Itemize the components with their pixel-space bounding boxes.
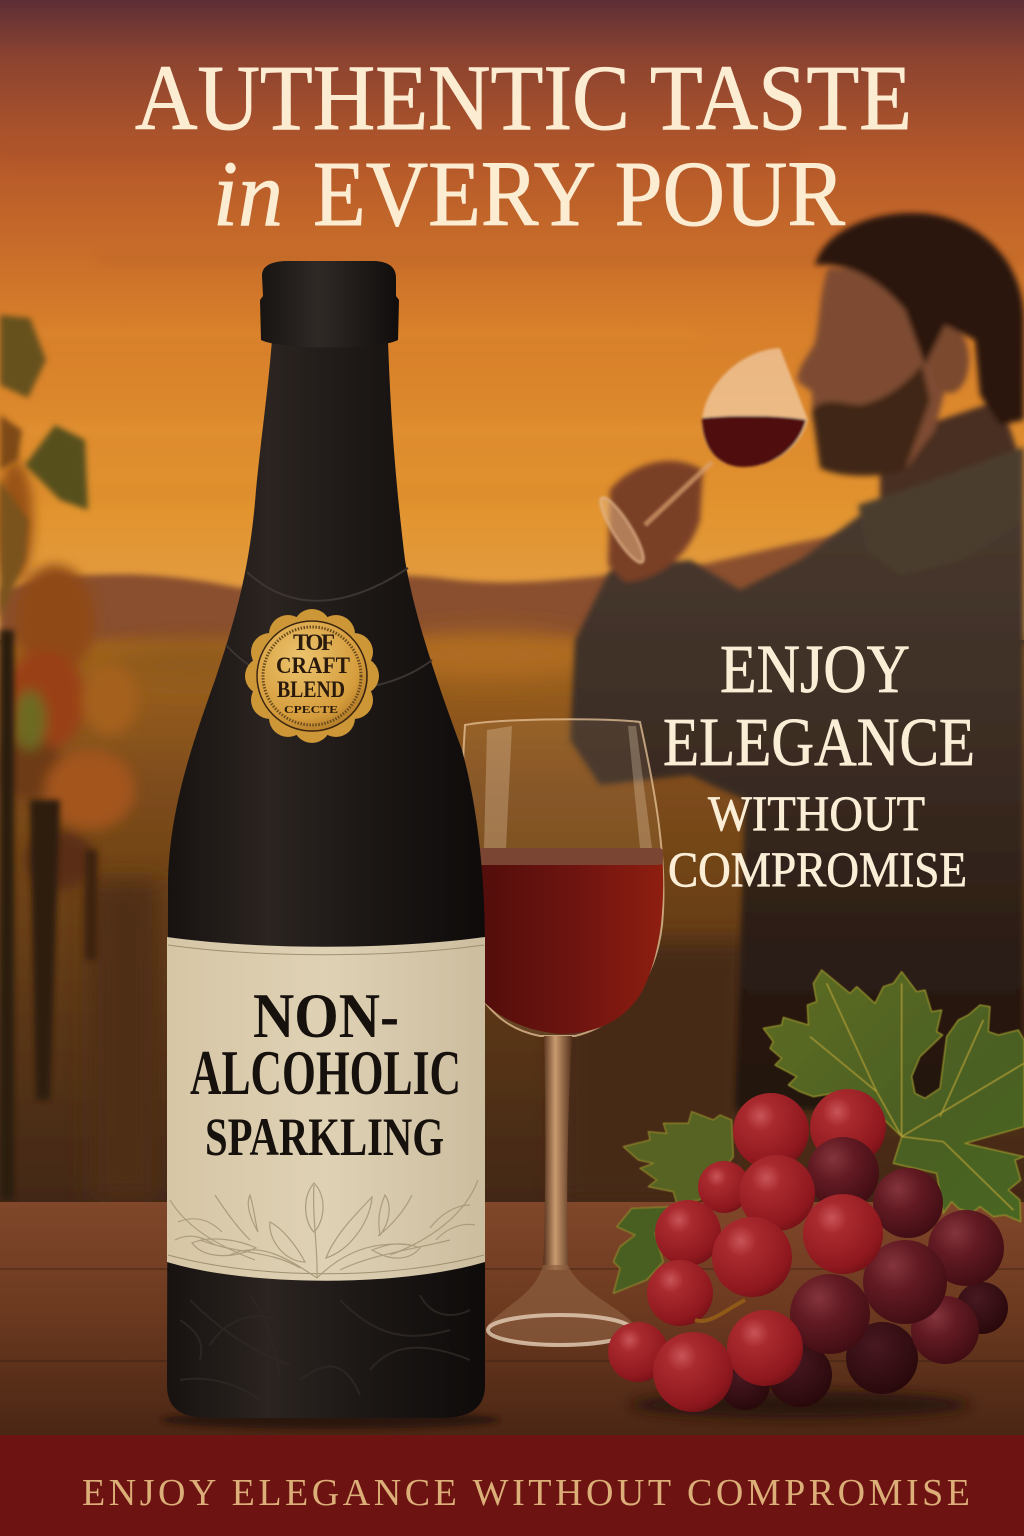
gold seal: CPECTE [284, 704, 338, 716]
label text: non-alcoholic sparkling [190, 980, 461, 1167]
bottle body [167, 340, 485, 1418]
hand holding glass [608, 461, 703, 582]
stem [543, 1036, 572, 1270]
turtleneck collar [858, 447, 1024, 575]
large grape leaf [763, 970, 1024, 1222]
banner text: ENJOY ELEGANCE WITHOUT COMPROMISE [82, 1472, 970, 1514]
glass bowl [462, 719, 663, 1036]
background: sunset sky [0, 0, 1024, 640]
bottle [160, 261, 500, 1429]
grape leaves [613, 970, 1024, 1293]
gold seal [245, 609, 379, 743]
front red grapes [608, 1089, 886, 1412]
side tagline [663, 631, 975, 897]
background: vine rows blurred [90, 633, 750, 1200]
sweater body [570, 470, 1024, 1110]
ear [931, 327, 969, 393]
bottle label [167, 937, 485, 1281]
background: vineyard field [0, 640, 1024, 1220]
lower grape leaf [613, 1207, 672, 1293]
hair [815, 213, 1024, 425]
label text: non-alcoholic sparkling: SPARKLING [205, 1107, 444, 1167]
side tagline: ELEGANCE [663, 704, 975, 780]
mid grapes [790, 1168, 1004, 1364]
label botanical drawing [170, 1180, 478, 1278]
title: EVERY POUR [313, 143, 845, 246]
side tagline: ENJOY [720, 631, 910, 707]
left vine with autumn leaves [0, 315, 138, 1200]
bottle shadow [160, 1411, 500, 1429]
neck [880, 400, 1024, 530]
gold seal: BLEND [277, 677, 345, 702]
glass highlight [484, 726, 652, 848]
face [797, 268, 960, 475]
side tagline: COMPROMISE [668, 841, 967, 897]
back dark grapes [720, 1282, 1008, 1410]
gold seal: TOF [293, 630, 335, 655]
foil fold [226, 568, 432, 690]
label text: non-alcoholic sparkling: NON- [253, 980, 399, 1051]
beard [812, 365, 930, 476]
small grape leaf [623, 1112, 733, 1203]
title [135, 47, 912, 246]
foot [488, 1265, 632, 1346]
grape stem [695, 1300, 745, 1321]
title: in [213, 143, 283, 246]
wine [470, 852, 663, 1034]
man's wine glass [594, 348, 808, 567]
background: distant hills [0, 530, 880, 680]
title: AUTHENTIC TASTE [135, 47, 912, 150]
wooden table [0, 1202, 1024, 1436]
gold seal: CRAFT [276, 653, 350, 678]
wine surface [470, 848, 663, 865]
bottle cap [260, 261, 399, 348]
embossed base pattern [180, 1295, 470, 1400]
wine glass [462, 719, 663, 1346]
man tasting wine, blurred in the background [570, 213, 1024, 1110]
label text: non-alcoholic sparkling: ALCOHOLIC [190, 1037, 461, 1108]
bunch of red grapes [608, 1089, 1008, 1419]
side tagline: WITHOUT [708, 785, 925, 841]
bottom banner [0, 1435, 1024, 1536]
grape shadow [630, 1391, 970, 1419]
